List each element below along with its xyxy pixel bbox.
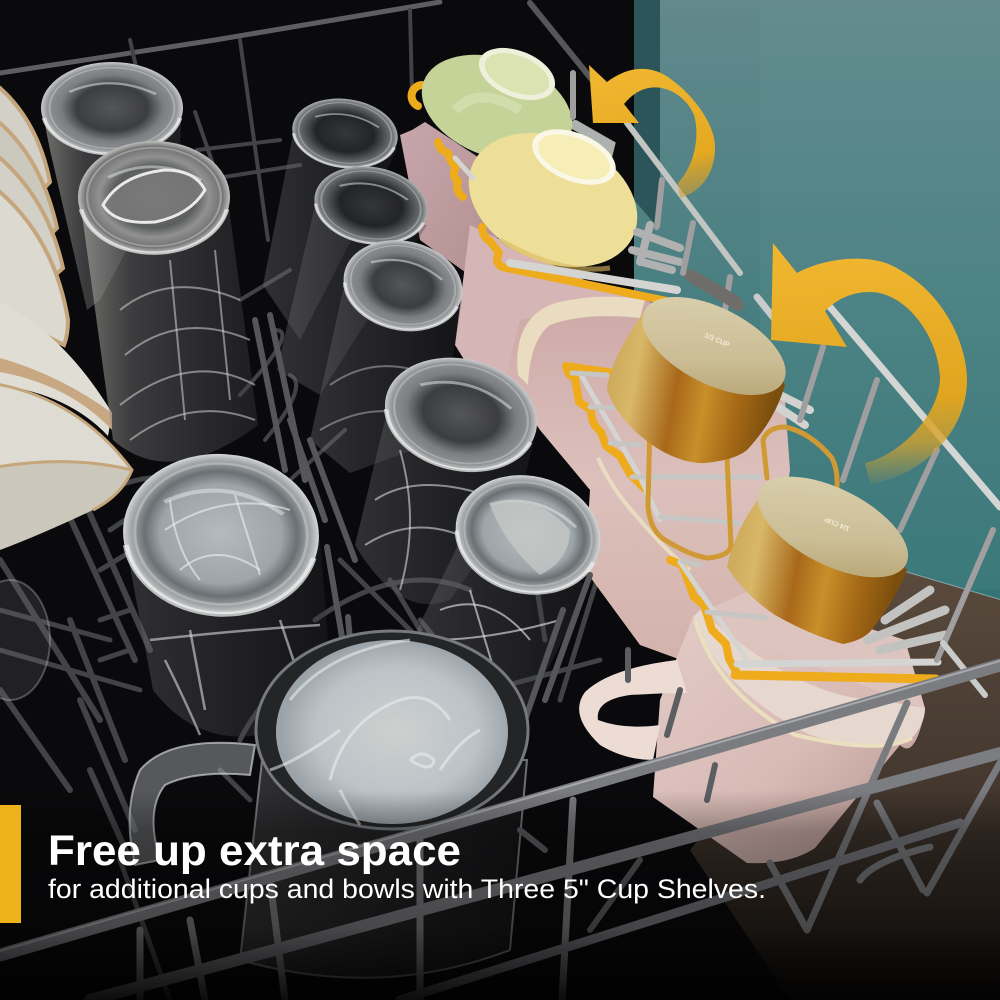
stacked plates <box>0 84 68 345</box>
front rack wires <box>0 650 1000 1000</box>
yellow shelf outlines <box>412 85 936 679</box>
arrow: upper rotation <box>589 65 715 198</box>
glass 2 <box>78 141 258 462</box>
rear rack wires <box>0 2 600 1000</box>
subheading: for additional cups and bowls with Three 5" Cup Shelves. <box>48 874 766 904</box>
dark text backdrop <box>0 790 1000 1000</box>
teal cabinet background <box>634 0 1000 1000</box>
rack tines in front of glasses <box>255 315 590 720</box>
cup label: 1/3 CUP <box>703 332 730 349</box>
middle mug mass <box>505 295 790 665</box>
floor <box>690 572 1000 1000</box>
lower mug rim <box>598 458 690 570</box>
green bowl <box>407 35 587 181</box>
glass 5 <box>310 229 471 473</box>
plates and bowls at left <box>0 84 132 550</box>
cream mug rim <box>517 297 645 385</box>
cup label: 1/4 CUP <box>824 515 851 532</box>
gold cup one-quarter <box>727 456 923 644</box>
white bowls <box>0 302 132 550</box>
far mug <box>400 122 500 272</box>
glass 6 <box>355 343 548 604</box>
faint glass at left edge <box>0 580 50 700</box>
yellow bowl <box>447 108 659 292</box>
shelf bracket behind bowls <box>575 125 610 165</box>
lower shelf <box>572 373 945 664</box>
pink mugs behind shelves <box>400 122 925 863</box>
upper shelf <box>455 158 738 305</box>
heading: Free up extra space <box>48 827 461 875</box>
glass mug with handle <box>130 631 528 978</box>
glass 4 <box>277 158 434 395</box>
caption block <box>48 827 766 904</box>
accent bar <box>0 805 21 923</box>
arrow: lower rotation <box>771 243 967 484</box>
upper side rack rails <box>530 3 1000 695</box>
glass 7 <box>417 461 612 715</box>
front mug <box>579 590 925 863</box>
glass 1 <box>41 62 183 310</box>
drinking glasses group <box>0 62 612 978</box>
glass 8 <box>118 447 328 737</box>
cup shelves <box>455 158 945 664</box>
gold cup handles <box>648 420 837 558</box>
glass 3 <box>263 92 402 340</box>
second mug <box>455 225 650 395</box>
gold cup one-third <box>607 277 801 463</box>
